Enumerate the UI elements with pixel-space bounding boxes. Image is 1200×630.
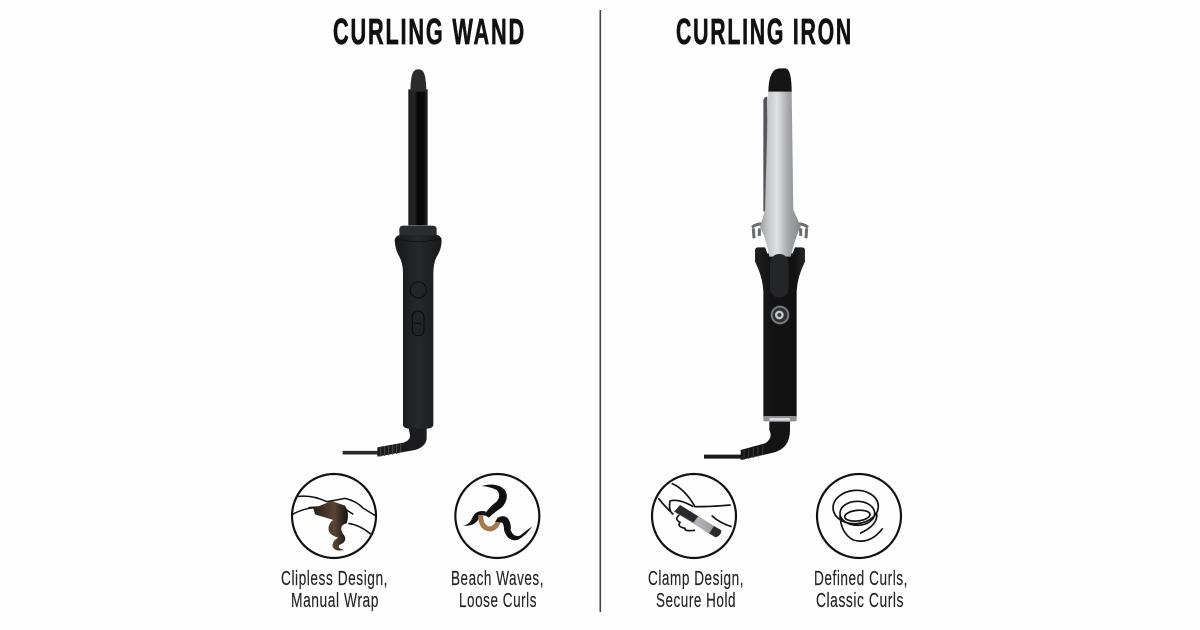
wand tip bbox=[410, 69, 426, 92]
center divider bbox=[600, 10, 601, 612]
wave strand upper bbox=[482, 485, 507, 518]
icon: beach waves bbox=[455, 474, 539, 558]
label: clamp design: Clamp Design, bbox=[648, 568, 744, 590]
wave strand left bbox=[463, 511, 486, 526]
wave strand brown bbox=[481, 515, 500, 529]
iron hinges bbox=[752, 224, 808, 238]
iron silver ring bbox=[763, 416, 797, 421]
wand handle bbox=[395, 235, 442, 429]
iron clamp lever bbox=[770, 254, 789, 297]
product: curling iron bbox=[704, 68, 808, 460]
wave strand right bbox=[495, 516, 532, 540]
iron dial bbox=[771, 306, 789, 324]
wrapped hair bbox=[313, 501, 348, 551]
icon: clamp hand bbox=[652, 474, 736, 558]
product: curling wand bbox=[343, 69, 442, 457]
wand collar bbox=[399, 226, 437, 235]
label: beach waves: Beach Waves, bbox=[451, 568, 544, 590]
label: clamp design: Secure Hold bbox=[656, 590, 736, 612]
wand power button bbox=[410, 282, 426, 298]
hand outline bbox=[658, 483, 732, 531]
icon: clipless hand wrap bbox=[292, 474, 376, 558]
iron strain relief bbox=[741, 422, 790, 460]
iron handle bbox=[755, 247, 805, 417]
iron tip bbox=[768, 68, 792, 92]
wand cable bbox=[343, 447, 380, 458]
title: curling iron: CURLING IRON bbox=[676, 11, 853, 52]
iron in hand bbox=[674, 505, 721, 537]
label: clipless design: Clipless Design, bbox=[281, 568, 388, 590]
iron cable bbox=[704, 451, 743, 463]
label: beach waves: Loose Curls bbox=[459, 590, 537, 612]
label: clipless design: Manual Wrap bbox=[291, 590, 379, 612]
spiral curl bbox=[832, 489, 883, 541]
label: defined curls: Defined Curls, bbox=[814, 568, 908, 590]
wand strain relief bbox=[377, 427, 427, 457]
wand barrel bbox=[408, 89, 428, 225]
wand temperature switch bbox=[412, 311, 424, 336]
label: defined curls: Classic Curls bbox=[816, 590, 904, 612]
iron barrel bbox=[760, 91, 801, 257]
hand outline bbox=[293, 496, 375, 534]
iron clamp blade bbox=[763, 97, 767, 212]
title: curling wand: CURLING WAND bbox=[333, 11, 526, 52]
icon: defined curls bbox=[817, 474, 901, 558]
